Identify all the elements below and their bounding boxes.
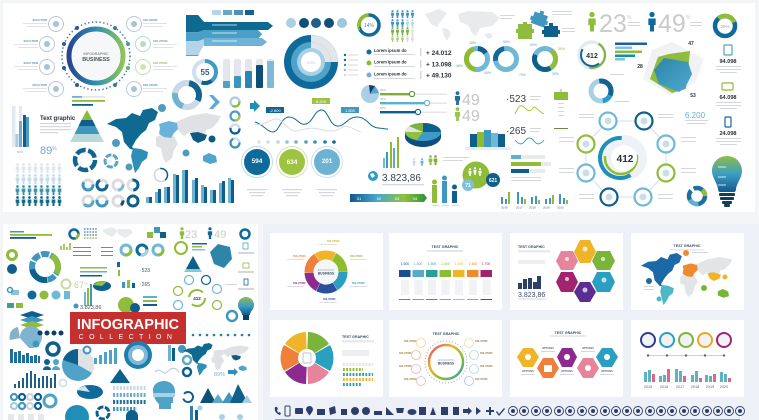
slide: puzzle hexagons: TEST GRAPHIC	[518, 245, 545, 249]
quarter ribbon: 02	[377, 196, 382, 201]
solution callouts: SOLUTION	[24, 39, 38, 43]
mini head	[153, 381, 175, 409]
slide: seven column table: 1.500	[428, 262, 436, 266]
solution callouts: SOLUTION	[33, 18, 47, 22]
slide: solution wheel: SOLUTION	[350, 255, 363, 258]
solution callouts: SOLUTION	[153, 61, 167, 65]
line chart: 1.800	[345, 108, 356, 113]
percent people: 49	[462, 92, 480, 109]
line chart	[255, 98, 388, 132]
mini sliders: %	[84, 281, 88, 286]
gauge 412 top: 412	[586, 53, 598, 60]
slide: rainbow ring	[389, 320, 502, 397]
device stats column: 64.098	[719, 95, 737, 101]
slide: timeline pins and bars: 2018	[691, 385, 699, 389]
3D pie	[405, 123, 441, 147]
solution callouts	[14, 16, 177, 96]
icon strip: next row	[275, 419, 740, 420]
slide: solution wheel: SOLUTION	[323, 298, 336, 301]
mini hub: 412	[193, 296, 201, 301]
progress bars	[511, 155, 551, 181]
mini avatars	[43, 359, 60, 370]
infographic business ring: INFOGRAPHIC	[83, 52, 109, 56]
two donuts: 50%	[530, 43, 537, 47]
mini sliders	[62, 267, 111, 291]
percent people: 49	[462, 108, 480, 125]
slide: color pie: TEST GRAPHIC	[342, 335, 369, 339]
slide: timeline pins and bars: 2019	[706, 385, 714, 389]
solution callouts: SOLUTION	[33, 83, 47, 87]
mini wave label	[110, 368, 179, 383]
slider bars: 50%	[380, 97, 386, 101]
slide: timeline pins and bars: 2015	[644, 385, 652, 389]
icon strip: circled icons	[508, 406, 744, 416]
radar chart	[637, 41, 704, 99]
slide: rainbow ring: SOLUTION	[404, 378, 417, 381]
mini percent people: 49	[214, 229, 226, 241]
donut with percent labels: 40%	[484, 71, 491, 75]
mini percent people: 23	[185, 229, 197, 241]
device stats column	[716, 45, 741, 145]
mini bar rows	[10, 349, 40, 363]
lorem ipsum stat rows: Lorem ipsum do	[374, 48, 407, 53]
quarter ribbon: 03	[395, 196, 400, 201]
solution callouts: SOLUTION	[153, 39, 167, 43]
slide: solution wheel: SOLUTION	[352, 282, 365, 285]
3.823,86 stat: 3.823,86	[382, 173, 421, 184]
radar chart: 53	[690, 93, 696, 99]
red banner	[70, 312, 186, 344]
text graphic with bars	[12, 106, 76, 157]
big percent people	[588, 10, 702, 38]
device stats column: 24.098	[719, 131, 737, 137]
gauge 55: 55	[201, 68, 210, 77]
hub with satellites 412: 412	[617, 154, 634, 165]
slide: rainbow ring: SOLUTION	[399, 365, 412, 368]
yearly small bars: 2018	[529, 206, 536, 210]
small donut grid	[83, 180, 138, 206]
two donuts: 30%	[558, 47, 565, 51]
red banner: INFOGRAPHIC	[77, 317, 180, 333]
stat circles 594, 634, 201: 201	[322, 158, 333, 165]
donut with percent labels: 46%	[456, 64, 463, 68]
slide: option hexagons: OPTIONS	[542, 346, 554, 350]
ring column	[230, 98, 240, 148]
mini grey map	[102, 227, 133, 238]
slide: rainbow ring: SOLUTION	[475, 378, 488, 381]
world map	[107, 104, 221, 173]
segmented donut	[172, 80, 202, 110]
donut 14%: 14%	[364, 23, 375, 29]
slide: option hexagons	[510, 320, 623, 397]
yearly small bars	[501, 192, 568, 210]
mini lorem rows	[73, 247, 113, 256]
quarter ribbon: 04	[413, 196, 418, 201]
tube bars	[223, 59, 274, 88]
text graphic with bars: 89	[40, 145, 52, 157]
mini donut grid	[11, 394, 56, 409]
percent people	[455, 91, 480, 125]
radar chart: 47	[688, 41, 694, 47]
line chart: 8.209	[316, 99, 327, 104]
mini people legend	[413, 155, 469, 166]
radar chart: 28	[637, 64, 643, 70]
solution callouts: SOLUTION	[143, 83, 157, 87]
slide: rainbow ring: BUSINESS	[438, 362, 454, 366]
mini bar row two	[14, 371, 66, 388]
lorem ipsum stat rows: + 24.012	[426, 50, 452, 57]
stat circles 594, 634, 201: 634	[287, 159, 298, 166]
donut 20%	[711, 12, 739, 40]
mini stats row: ·265	[140, 282, 150, 288]
panel: collection cover	[3, 224, 258, 420]
two donuts: 70%	[519, 73, 526, 77]
mini side donuts: 89%	[214, 372, 225, 378]
big percent people: 49	[658, 10, 686, 38]
mini bars chart	[84, 346, 117, 364]
people pictogram	[16, 163, 61, 206]
stats with waves: ·523	[506, 94, 526, 105]
slide: seven column table: 1.700	[482, 262, 490, 266]
mini 3.823,86: 3.823,86	[80, 305, 101, 311]
people grid	[391, 10, 414, 42]
stat circles 594, 634, 201: 594	[252, 158, 263, 165]
panel: bottom right backdrop	[263, 224, 759, 420]
hub with satellites 412	[559, 112, 696, 206]
slide: option hexagons: OPTIONS	[561, 369, 573, 373]
slide: solution wheel: SOLUTION	[293, 255, 306, 258]
donut upper mid	[588, 74, 629, 104]
slide: rainbow ring: SOLUTION	[404, 340, 417, 343]
slide: rainbow ring: SOLUTION	[475, 340, 488, 343]
mini hub	[174, 276, 254, 321]
mini stats row	[7, 262, 150, 308]
slider bars: 38%	[380, 88, 386, 92]
yearly small bars: 2017	[516, 206, 523, 210]
mini 3.823,86	[74, 304, 101, 311]
red banner: COLLECTION	[79, 334, 177, 341]
slide: color pie	[270, 320, 383, 397]
light bulb	[712, 156, 742, 207]
mini world map	[183, 343, 249, 376]
quarter ribbon	[350, 194, 427, 202]
big percent people: %	[627, 15, 632, 21]
mini segmented ring	[7, 249, 63, 292]
lorem ipsum stat rows	[366, 48, 452, 80]
tall pin bars	[432, 176, 459, 206]
lorem ipsum stat rows: + 49.130	[426, 72, 452, 80]
dot timeline	[257, 140, 336, 144]
quarter ribbon: 01	[357, 196, 362, 201]
mini mountains	[200, 384, 252, 403]
mini lower pie	[10, 326, 64, 355]
slide: world map: TEST GRAPHIC	[674, 244, 701, 248]
donut with percent labels	[456, 41, 491, 75]
donut with percent labels: 16%	[469, 41, 476, 45]
slide: rainbow ring: SOLUTION	[480, 365, 493, 368]
slide: timeline pins and bars: 2020	[720, 385, 728, 389]
slide: rainbow ring: TEST GRAPHIC	[433, 332, 460, 336]
stats with waves	[506, 94, 544, 144]
mini large pie	[62, 349, 94, 381]
mini bars tall	[84, 284, 92, 306]
panel: top infographic sheet	[3, 3, 755, 212]
two donuts: 56%	[503, 40, 510, 44]
large layered donut	[284, 35, 358, 89]
slide: rainbow ring: SOLUTION	[480, 352, 493, 355]
green people bubble	[462, 162, 500, 191]
mini big ring	[124, 341, 186, 369]
text graphic with bars: 50%	[17, 150, 23, 154]
slide: solution wheel	[270, 233, 383, 310]
3.823,86 stat	[368, 171, 424, 185]
donut 20%: 20%	[720, 24, 730, 29]
yearly small bars: 2020	[557, 206, 564, 210]
stats with waves: ·265	[506, 126, 526, 137]
big percent people: %	[686, 15, 691, 21]
line chart: -2.800	[269, 108, 281, 113]
yearly small bars: 2016	[501, 206, 508, 210]
yearly small bars: 2019	[543, 206, 550, 210]
slide: option hexagons: OPTIONS	[601, 369, 613, 373]
bar chart	[146, 168, 234, 203]
two donuts	[494, 40, 565, 77]
slide: seven column table: 1.500	[469, 262, 477, 266]
slide: option hexagons: OPTIONS	[522, 369, 534, 373]
stacked bars and pyramid	[70, 96, 105, 142]
slide: solution wheel: BUSINESS	[318, 272, 334, 276]
slide: rainbow ring: SOLUTION	[399, 352, 412, 355]
6.200 stat	[685, 111, 708, 124]
dotted grey map	[425, 9, 500, 41]
lorem ipsum stat rows: + 13.098	[426, 62, 452, 68]
device stats column: 94.098	[719, 59, 737, 65]
solution callouts: SOLUTION	[143, 18, 157, 22]
gauge 55	[194, 61, 216, 83]
slide: timeline pins and bars: 2017	[676, 385, 684, 389]
solution callouts: SOLUTION	[24, 61, 38, 65]
green sign	[554, 89, 568, 129]
green people bubble: 71	[465, 183, 471, 189]
mini side donuts	[183, 356, 238, 378]
slide: timeline pins and bars	[631, 320, 744, 397]
mini donut and grid	[61, 229, 98, 250]
chevron and arrow	[209, 95, 260, 112]
mini bottom shapes	[8, 405, 243, 420]
mini sliders: 67	[74, 280, 84, 290]
tall bars	[383, 137, 399, 168]
slide: seven column table: 1.500	[401, 262, 409, 266]
large layered donut: 20%	[307, 60, 315, 65]
donut 14%	[356, 12, 382, 38]
icon strip: solid icons	[275, 406, 505, 416]
slider bars	[380, 88, 447, 115]
lorem ipsum stat rows: Lorem ipsum do	[374, 72, 407, 76]
lorem ipsum stat rows: Lorem ipsum do	[374, 60, 407, 64]
mini puzzles	[147, 227, 166, 238]
mini donut row	[121, 242, 187, 255]
mini ellipse pie and people	[77, 385, 147, 409]
horizontal bars	[615, 42, 647, 60]
slide: timeline pins and bars: 2016	[660, 385, 668, 389]
slide: puzzle hexagons: 3.823,86	[518, 292, 545, 299]
slide: world map	[631, 233, 744, 310]
mini stats row: ·523	[140, 268, 150, 274]
gauge 412 top	[574, 37, 610, 73]
big percent people: 23	[599, 10, 627, 38]
slider bars: 86%	[380, 106, 386, 110]
slide: option hexagons: TEST GRAPHIC	[555, 331, 582, 335]
podium chart	[465, 130, 511, 150]
6.200 stat: 6.200	[685, 111, 706, 120]
slide: seven column table: 1.500	[455, 262, 463, 266]
ribbon table	[186, 10, 273, 56]
slide: solution wheel: SOLUTION	[327, 240, 340, 243]
mini layered stack	[20, 311, 44, 329]
slide: seven column table: 1.500	[441, 262, 450, 266]
infographic business ring: BUSINESS	[82, 57, 110, 63]
slide: option hexagons: OPTIONS	[582, 346, 594, 350]
mini gauge 55	[183, 392, 193, 402]
small pie	[361, 85, 379, 103]
slide: solution wheel: SOLUTION	[293, 282, 306, 285]
text graphic with bars: %	[52, 146, 57, 152]
slide: rainbow ring: INFOGRAPHIC	[438, 359, 455, 362]
puzzle pieces	[500, 8, 575, 39]
mini green bubble	[118, 296, 157, 313]
circular arrows	[75, 150, 117, 170]
mini radar and pyramid	[184, 243, 232, 272]
circular chain	[686, 185, 708, 207]
mini bars	[10, 231, 52, 239]
infographic business ring	[62, 22, 130, 90]
small circles row	[286, 18, 347, 28]
slide: seven column table: TEST GRAPHIC	[432, 245, 459, 249]
two donuts: 35%	[552, 72, 559, 76]
stat circles 594, 634, 201	[242, 146, 342, 196]
green people bubble: 621	[489, 178, 497, 184]
mini percent people	[180, 227, 250, 241]
slide: puzzle hexagons	[510, 233, 623, 310]
text graphic with bars: Text graphic	[40, 116, 76, 122]
slide: solution wheel: INFOGRAPHIC	[318, 269, 335, 272]
mini right stats	[238, 243, 254, 290]
slide: seven column table: 1.500	[414, 262, 422, 266]
mini dots row	[192, 334, 250, 336]
slide: seven column table	[389, 233, 502, 310]
